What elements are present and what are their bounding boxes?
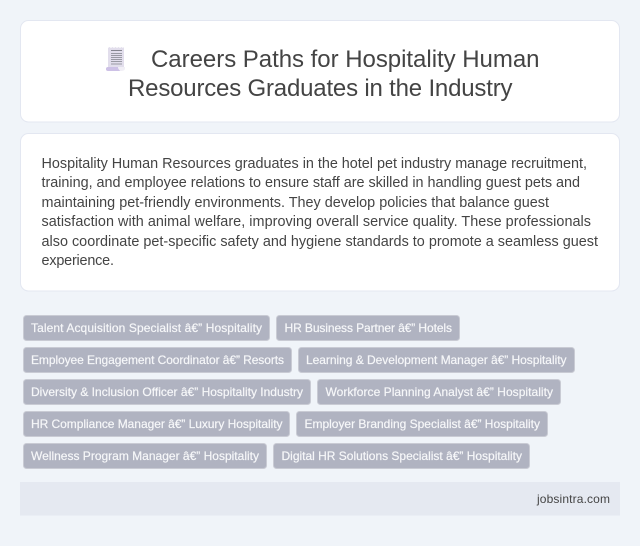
text block: description: satisfaction with animal welfare, improving overall service quality. These professionals (42, 214, 591, 230)
tag: Digital HR Solutions Specialist (274, 444, 530, 468)
footer (20, 482, 620, 516)
tag: HR Compliance Manager (24, 412, 290, 436)
panel: header (20, 20, 620, 122)
tag: Talent Acquisition Specialist: Talent Acquisition Specialist â€” Hospitality (31, 321, 262, 335)
title: Careers Paths for Hospitality Human (151, 46, 540, 73)
tag: Employee Engagement Coordinator: Employee Engagement Coordinator â€” Resorts (31, 353, 284, 367)
tag list (24, 316, 574, 468)
text block: description: experience. (42, 253, 114, 269)
tag: Diversity & Inclusion Officer: Diversity & Inclusion Officer â€” Hospitality Industry (31, 385, 303, 399)
tag: Diversity & Inclusion Officer (24, 380, 310, 404)
tag: HR Compliance Manager: HR Compliance Manager â€” Luxury Hospitality (31, 417, 282, 431)
tag: Digital HR Solutions Specialist: Digital HR Solutions Specialist â€” Hospitality (282, 449, 522, 463)
tag: HR Business Partner (276, 316, 460, 340)
tag: Workforce Planning Analyst: Workforce Planning Analyst â€” Hospitality (326, 385, 553, 399)
tag: Employee Engagement Coordinator (24, 348, 292, 372)
tag: HR Business Partner: HR Business Partner â€” Hotels (284, 321, 452, 335)
tag: Workforce Planning Analyst (318, 380, 560, 404)
tag: Wellness Program Manager (24, 444, 266, 468)
tag: Wellness Program Manager: Wellness Program Manager â€” Hospitality (31, 449, 259, 463)
icon: receipt scroll (106, 47, 125, 71)
tag: Employer Branding Specialist: Employer Branding Specialist â€” Hospitality (304, 417, 540, 431)
title (128, 46, 540, 102)
text block: description: also coordinate pet-specific safety and hygiene standards to promote a seamless guest (42, 234, 598, 250)
tag: Learning & Development Manager: Learning & Development Manager â€” Hospitality (306, 353, 566, 367)
text block: description: maintaining pet-friendly environments. They develop policies that balance guest (42, 195, 549, 211)
tag: Employer Branding Specialist (296, 412, 548, 436)
text block: description (42, 156, 598, 269)
title: Resources Graduates in the Industry (128, 75, 512, 102)
tag: Learning & Development Manager (298, 348, 574, 372)
panel: description (20, 134, 620, 291)
tag: Talent Acquisition Specialist (24, 316, 270, 340)
footer: jobsintra.com (536, 492, 610, 506)
text block: description: Hospitality Human Resources graduates in the hotel pet industry manage recruitment, (42, 156, 587, 172)
text block: description: training, and employee relations to ensure staff are skilled in handling guest pets and (42, 175, 580, 191)
